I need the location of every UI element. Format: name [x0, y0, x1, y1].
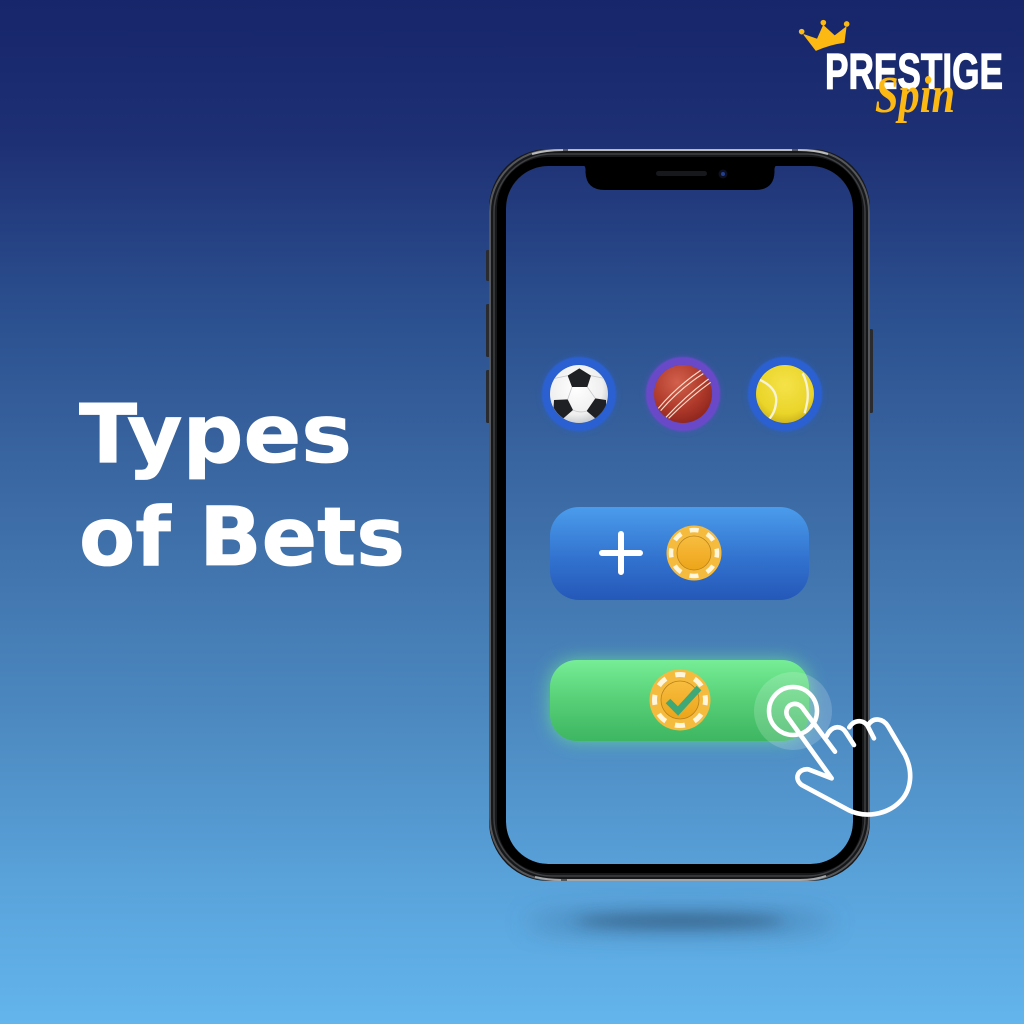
logo word: Spin: Spin	[875, 67, 955, 124]
icon: soccer ball	[541, 356, 617, 432]
title	[79, 388, 405, 585]
title: Types	[79, 388, 352, 482]
touch indicator	[754, 672, 832, 750]
logo: Prestige Spin	[799, 20, 1003, 124]
title: of Bets	[79, 491, 405, 585]
notch	[583, 165, 777, 190]
camera	[718, 170, 728, 178]
speaker	[656, 171, 707, 176]
icon: crown	[799, 20, 849, 50]
phone frame	[490, 150, 869, 880]
icon: tennis ball	[747, 356, 823, 432]
icon: chip with check	[650, 670, 710, 730]
phone	[486, 150, 873, 880]
icon: chip	[666, 526, 722, 580]
icon: plus	[602, 534, 640, 572]
icon: hand pointer	[786, 704, 910, 815]
side buttons	[486, 250, 873, 423]
frame highlights	[532, 150, 828, 880]
sport icons	[541, 356, 823, 432]
button: add chip	[550, 507, 809, 600]
button: confirm bet	[550, 660, 809, 741]
phone shadow	[525, 913, 835, 931]
icon: cricket ball	[645, 356, 721, 432]
